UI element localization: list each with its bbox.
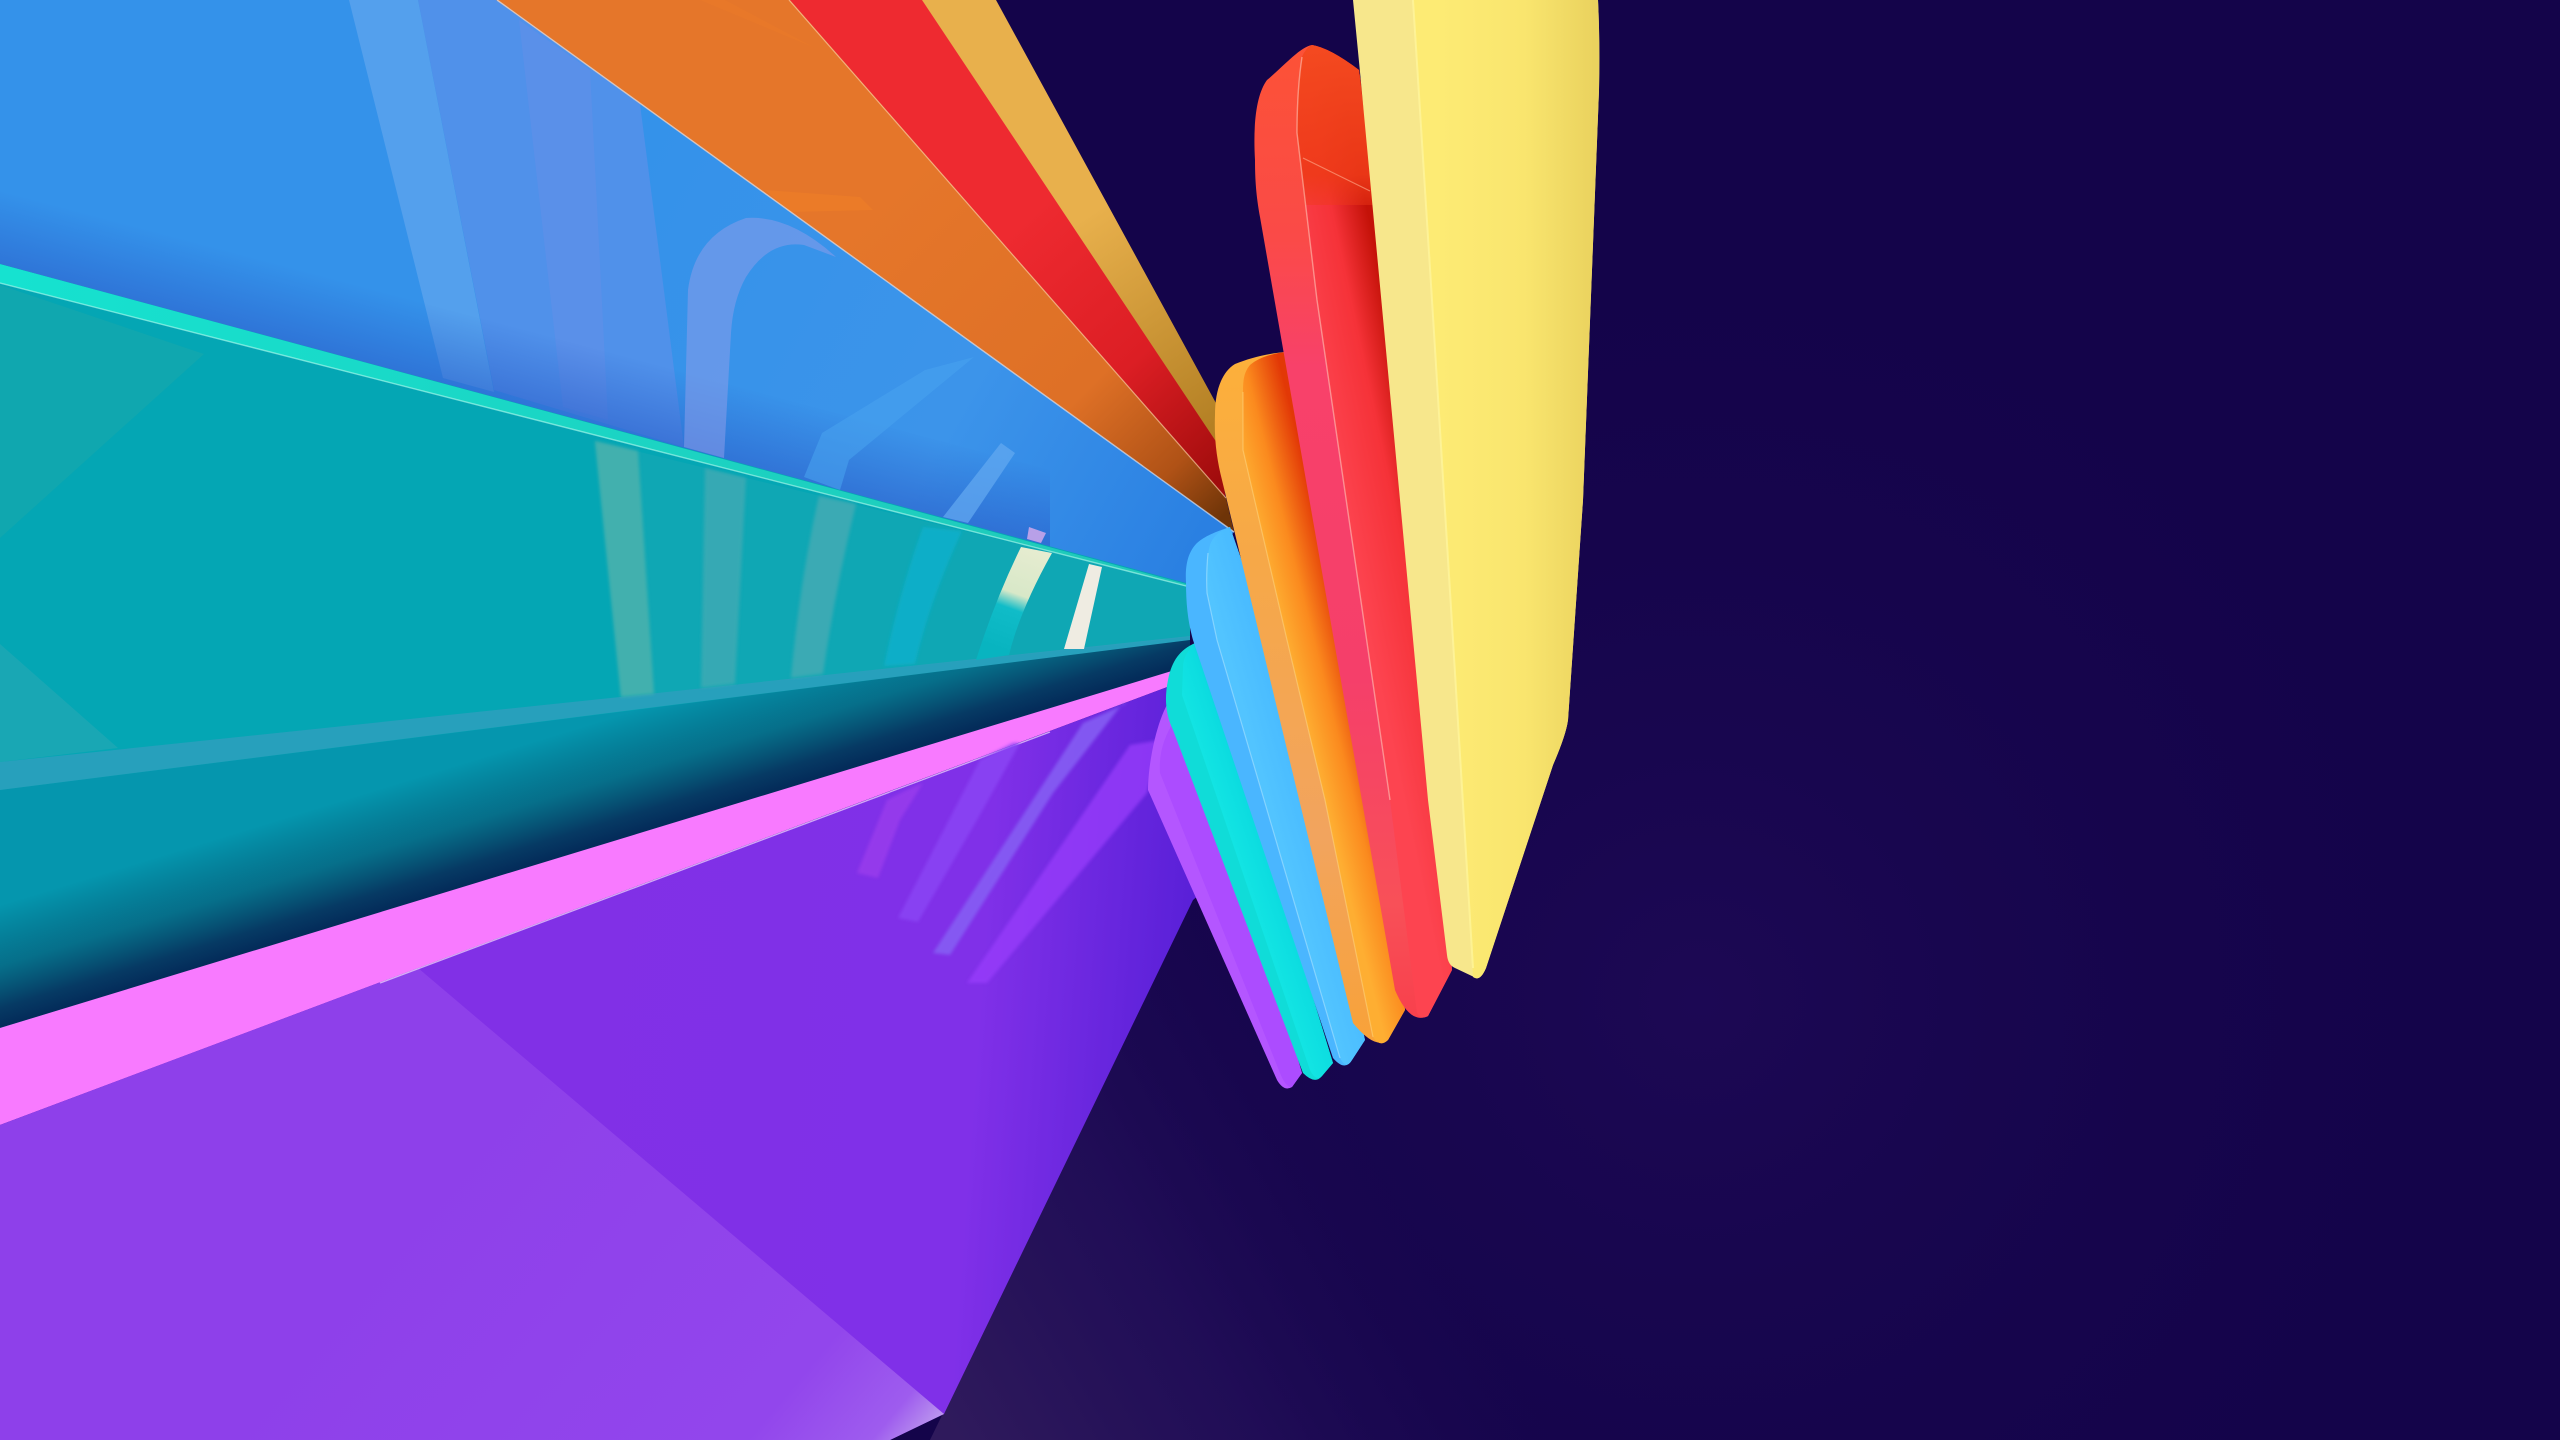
panel: teal wedge xyxy=(0,264,1190,1028)
panel: orange wedge xyxy=(496,0,1234,532)
panel: gold wedge xyxy=(920,0,1217,445)
bar: blue xyxy=(1186,527,1365,1066)
bar: orange xyxy=(1215,352,1405,1043)
panel: pink band xyxy=(0,670,1175,1125)
bar: yellow xyxy=(1353,0,1599,978)
bar: red xyxy=(1254,45,1452,1018)
panel: blue wedge xyxy=(0,0,1234,586)
panel: purple wedge xyxy=(0,686,1205,1440)
bar: purple xyxy=(1148,690,1302,1088)
bar: teal xyxy=(1166,643,1333,1080)
floor reflection xyxy=(930,900,2000,1440)
panel: red wedge xyxy=(788,0,1226,500)
